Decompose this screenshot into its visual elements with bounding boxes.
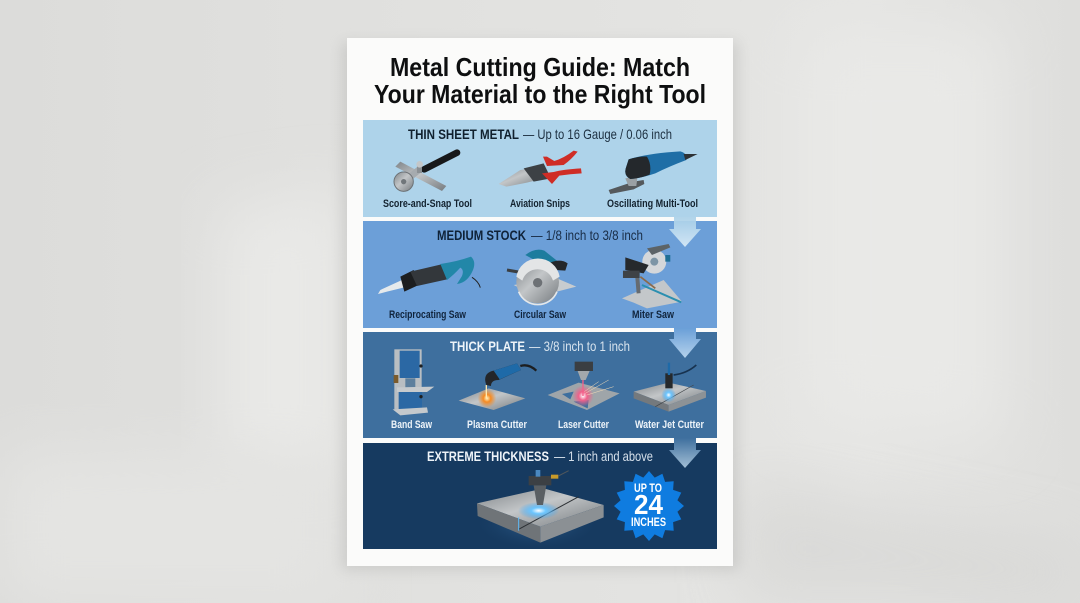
heading: thin sheet metal [408, 126, 672, 142]
text: reciprocating saw label: Reciprocating Saw [389, 309, 466, 321]
title: Your Material to the Right Tool [374, 79, 706, 109]
heading: medium stock: MEDIUM STOCK [437, 227, 526, 243]
text: band saw label: Band Saw [391, 419, 432, 431]
arrow: medium to thick [669, 328, 701, 358]
badge: up to 24 inches [614, 471, 684, 541]
heading: medium stock [437, 227, 643, 243]
icon: aviation snips [499, 151, 582, 187]
text: oscillating multi-tool label: Oscillating Multi-Tool [607, 198, 698, 210]
icon: laser cutter [548, 362, 620, 410]
panel: thin sheet metal [363, 120, 717, 217]
icon: thick plate being cut [474, 470, 604, 550]
badge: up to 24 inches: INCHES [631, 517, 666, 529]
icon: oscillating multi-tool [609, 151, 698, 194]
text: miter saw label: Miter Saw [632, 309, 674, 321]
badge: up to 24 inches: UP TO [634, 483, 662, 495]
icon: water jet cutter [634, 363, 706, 412]
panel: thick plate [363, 332, 717, 438]
icon: score-and-snap tool [394, 153, 457, 191]
icon: band saw [393, 349, 434, 415]
icon: circular saw [507, 250, 576, 305]
heading: extreme thickness: — 1 inch and above [554, 448, 653, 464]
heading: thick plate: THICK PLATE [450, 338, 525, 354]
heading: extreme thickness [427, 448, 653, 464]
arrow: thick to extreme [669, 438, 701, 468]
arrow: thin to medium [669, 217, 701, 247]
text: score-and-snap tool label: Score-and-Snap Tool [383, 198, 472, 210]
heading: thin sheet metal: THIN SHEET METAL [408, 126, 519, 142]
title: Metal Cutting Guide: Match [390, 52, 690, 82]
badge: up to 24 inches: 24 [634, 489, 663, 520]
heading: medium stock: — 1/8 inch to 3/8 inch [531, 227, 643, 243]
text: laser cutter label: Laser Cutter [558, 419, 610, 431]
poster card [342, 38, 738, 570]
text: plasma cutter label: Plasma Cutter [467, 419, 528, 431]
icon: miter saw [622, 244, 682, 308]
icon: reciprocating saw [378, 257, 480, 294]
heading: thick plate [450, 338, 630, 354]
panel: extreme thickness [363, 443, 717, 550]
text: circular saw label: Circular Saw [514, 309, 566, 321]
panel: medium stock [363, 221, 717, 328]
text: water jet cutter label: Water Jet Cutter [635, 419, 705, 431]
heading: thick plate: — 3/8 inch to 1 inch [529, 338, 630, 354]
heading: thin sheet metal: — Up to 16 Gauge / 0.06 inch [523, 126, 672, 142]
title [374, 52, 706, 109]
text: aviation snips label: Aviation Snips [510, 198, 570, 210]
heading: extreme thickness: EXTREME THICKNESS [427, 448, 549, 464]
icon: plasma cutter [459, 363, 536, 410]
